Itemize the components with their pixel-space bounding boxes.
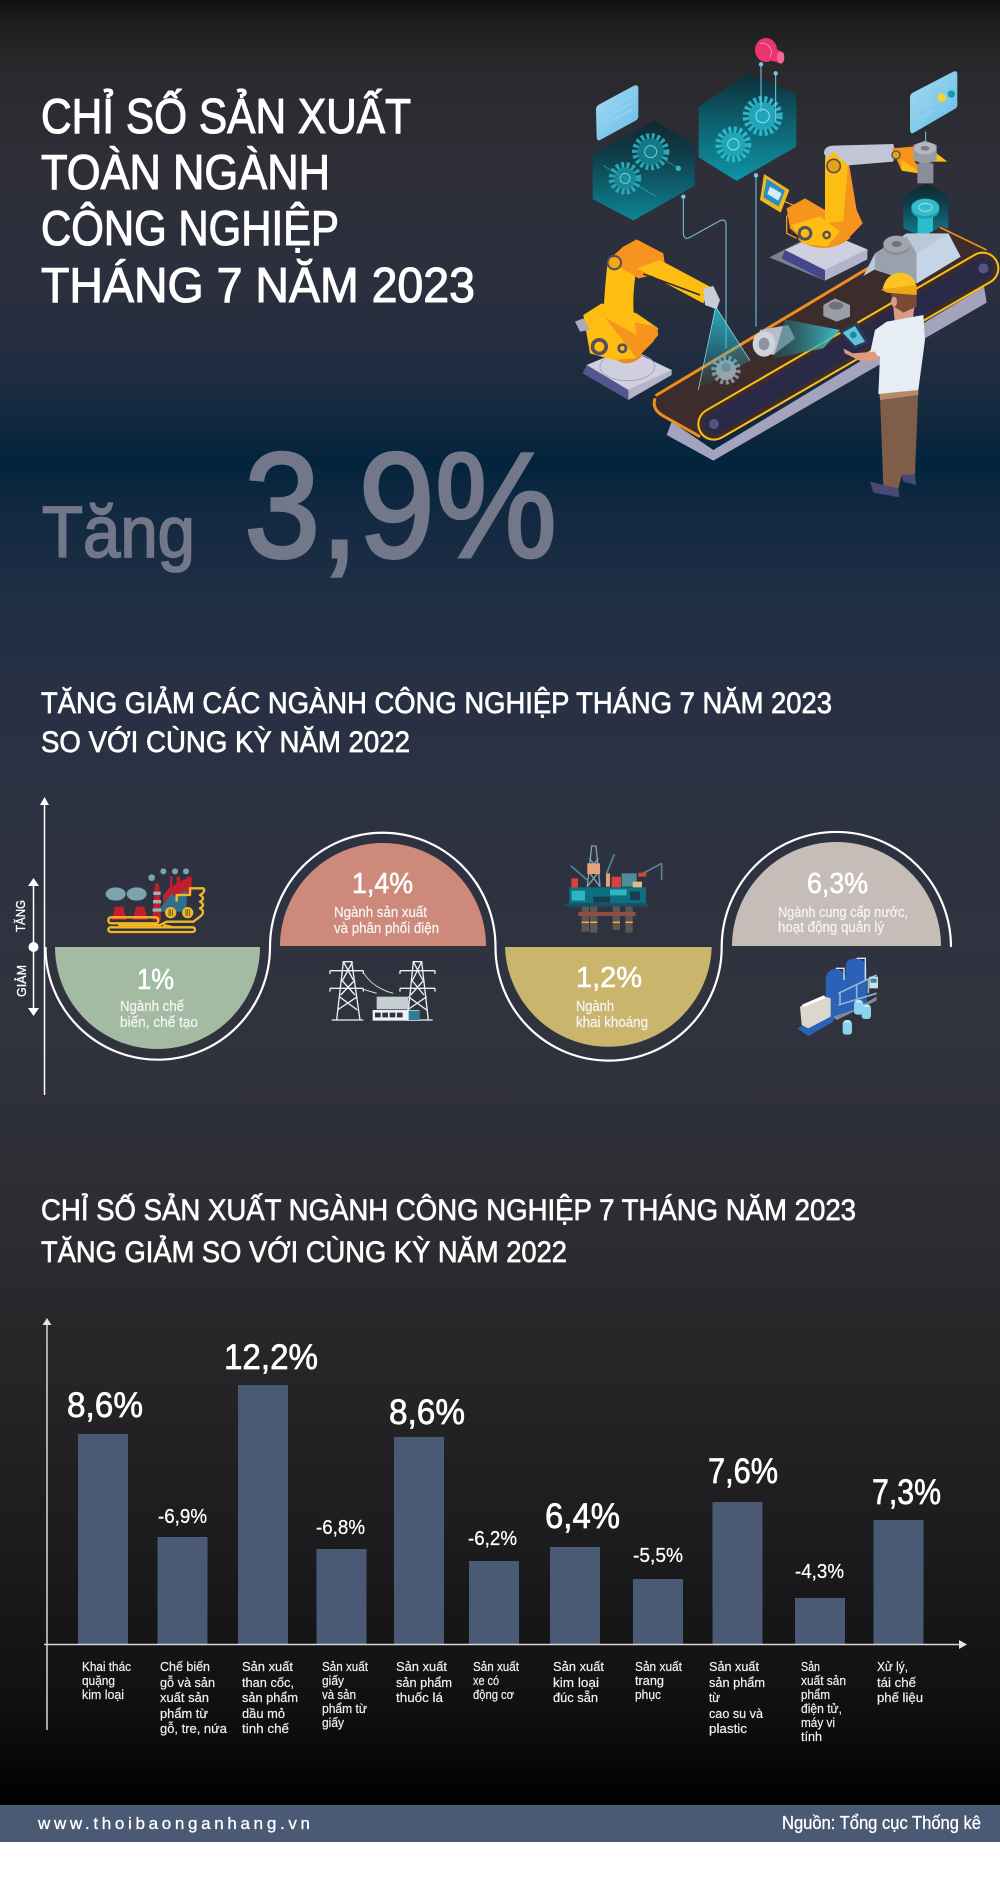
value labels [67,1338,941,1583]
headline figure: Tăng 3,9% [42,421,557,589]
panel: electricity 1,4%: và phân phối điện [334,921,439,937]
section heading: seven months [41,1193,856,1269]
category labels: Xử lý, [877,1659,908,1674]
headline figure: Tăng 3,9%: Tăng [42,493,195,573]
holographic bolt [903,183,948,238]
category labels: thuốc lá [396,1690,444,1705]
conveyor belt [654,226,996,461]
panel: mining 1,2% [505,947,712,1047]
title: THÁNG 7 NĂM 2023 [41,259,475,313]
bars [78,1385,924,1644]
bar chart [42,1318,967,1744]
category labels: Khai thác [82,1659,131,1674]
value labels: -4,3% [795,1561,844,1583]
category labels: Sản xuất [242,1659,293,1674]
category labels: than cốc, [242,1675,294,1690]
panel: manufacturing 1%: biến, chế tạo [120,1015,198,1031]
category labels: giấy [322,1715,344,1730]
value labels: 7,6% [708,1452,778,1491]
section heading: seven months: TĂNG GIẢM SO VỚI CÙNG KỲ NĂM 2022 [41,1235,567,1269]
value labels: 6,4% [545,1497,620,1536]
category labels: phế liệu [877,1690,923,1705]
tablet beam [773,319,840,358]
value labels: 12,2% [224,1338,318,1377]
panel: water 6,3% [732,842,941,946]
panel: manufacturing 1%: 1% [137,964,174,996]
category labels: máy vi [801,1715,835,1730]
holographic gear box centre [700,75,795,179]
category labels: động cơ [473,1687,514,1702]
panel: mining 1,2%: khai khoáng [576,1015,648,1031]
icon: water treatment [797,958,878,1036]
category labels: phẩm [801,1687,830,1702]
category labels: sản phẩm [396,1675,452,1690]
category labels: Sản xuất [322,1659,368,1674]
axis: up / down [13,797,49,1095]
category labels: gỗ và sản [160,1675,215,1690]
panel: electricity 1,4% [280,843,486,946]
value labels: 7,3% [872,1473,941,1512]
category labels: từ [709,1690,720,1705]
category labels: đúc sẵn [553,1690,598,1705]
panel: water 6,3%: 6,3% [807,868,868,900]
value labels: -5,5% [633,1545,683,1567]
footer [0,1805,1000,1891]
category labels: tính [801,1729,822,1744]
info panel right [910,71,957,133]
info panel left [596,85,638,140]
icon: power pylons [330,962,435,1021]
category labels: và sản [322,1687,356,1702]
category labels: dầu mỏ [242,1706,285,1721]
category labels: quặng [82,1673,115,1688]
category labels: giấy [322,1673,344,1688]
section heading: seven months: CHỈ SỐ SẢN XUẤT NGÀNH CÔNG NGHIỆP 7 THÁNG NĂM 2023 [41,1193,856,1227]
category labels: điện tử, [801,1701,842,1716]
category labels: kim loại [553,1675,599,1690]
category labels: Sản xuất [473,1659,519,1674]
robot arm lower [575,239,720,400]
category labels [82,1659,923,1744]
title: TOÀN NGÀNH [41,146,330,200]
illustration: smart factory [575,38,996,497]
connector lines [682,63,926,348]
machine on conveyor [863,233,961,283]
category labels: phục [635,1687,661,1702]
category labels: Sản xuất [635,1659,682,1674]
category labels: trang [635,1673,664,1688]
panel: electricity 1,4%: Ngành sản xuất [334,905,427,921]
section heading: monthly change: SO VỚI CÙNG KỲ NĂM 2022 [41,726,410,759]
headline figure: Tăng 3,9%: 3,9% [244,421,557,589]
value labels: 8,6% [389,1393,465,1432]
chart axes [42,1318,967,1730]
category labels: xuất sản [160,1690,209,1705]
panel: manufacturing 1% [55,947,260,1049]
category labels: xe có [473,1673,499,1688]
category labels: sản phẩm [709,1675,765,1690]
category labels: Sản xuất [553,1659,604,1674]
category labels: Chế biến [160,1659,210,1674]
category labels: sản phẩm [242,1690,298,1705]
icon: factory [106,868,204,932]
title: CHỈ SỐ SẢN XUẤT [41,89,411,144]
panel: mining 1,2%: 1,2% [576,962,642,994]
panel: water 6,3%: Ngành cung cấp nước, [778,905,908,921]
section heading: monthly change [41,686,832,759]
value labels: -6,8% [316,1517,365,1539]
category labels: kim loại [82,1687,124,1702]
category labels: cao su và [709,1706,764,1721]
footer: Nguồn: Tổng cục Thống kê [782,1813,981,1833]
pink part [755,38,784,64]
worker [839,273,925,497]
category labels: xuất sản [801,1673,846,1688]
axis: up / down: GIẢM [14,965,29,997]
value labels: -6,2% [468,1528,517,1550]
icon: oil rig [564,846,662,933]
title: CÔNG NGHIỆP [41,202,339,256]
category labels: Sản xuất [396,1659,447,1674]
panel: electricity 1,4%: 1,4% [352,868,413,900]
axis: up / down: TĂNG [13,900,28,932]
wave outline [46,832,951,1061]
category labels: tinh chế [242,1721,290,1736]
category labels: tái chế [877,1675,917,1690]
category labels: Sản [801,1659,820,1674]
panel: mining 1,2%: Ngành [576,999,614,1015]
title [41,89,475,313]
category labels: Sản xuất [709,1659,759,1674]
value labels: 8,6% [67,1386,143,1425]
category labels: gỗ, tre, nứa [160,1721,228,1736]
section heading: monthly change: TĂNG GIẢM CÁC NGÀNH CÔNG NGHIỆP THÁNG 7 NĂM 2023 [41,686,832,720]
category labels: phẩm từ [322,1701,367,1716]
scanner beam [698,307,750,390]
value labels: -6,9% [158,1506,207,1528]
conveyor items [714,298,850,382]
holographic gear box left [594,122,693,219]
robot arm upper [760,141,947,281]
panel: water 6,3%: hoạt động quản lý [778,920,885,936]
footer: www.thoibaonganhang.vn [37,1814,310,1833]
category labels: plastic [709,1721,748,1736]
category labels: phẩm từ [160,1706,208,1721]
panel: manufacturing 1%: Ngành chế [120,999,184,1015]
